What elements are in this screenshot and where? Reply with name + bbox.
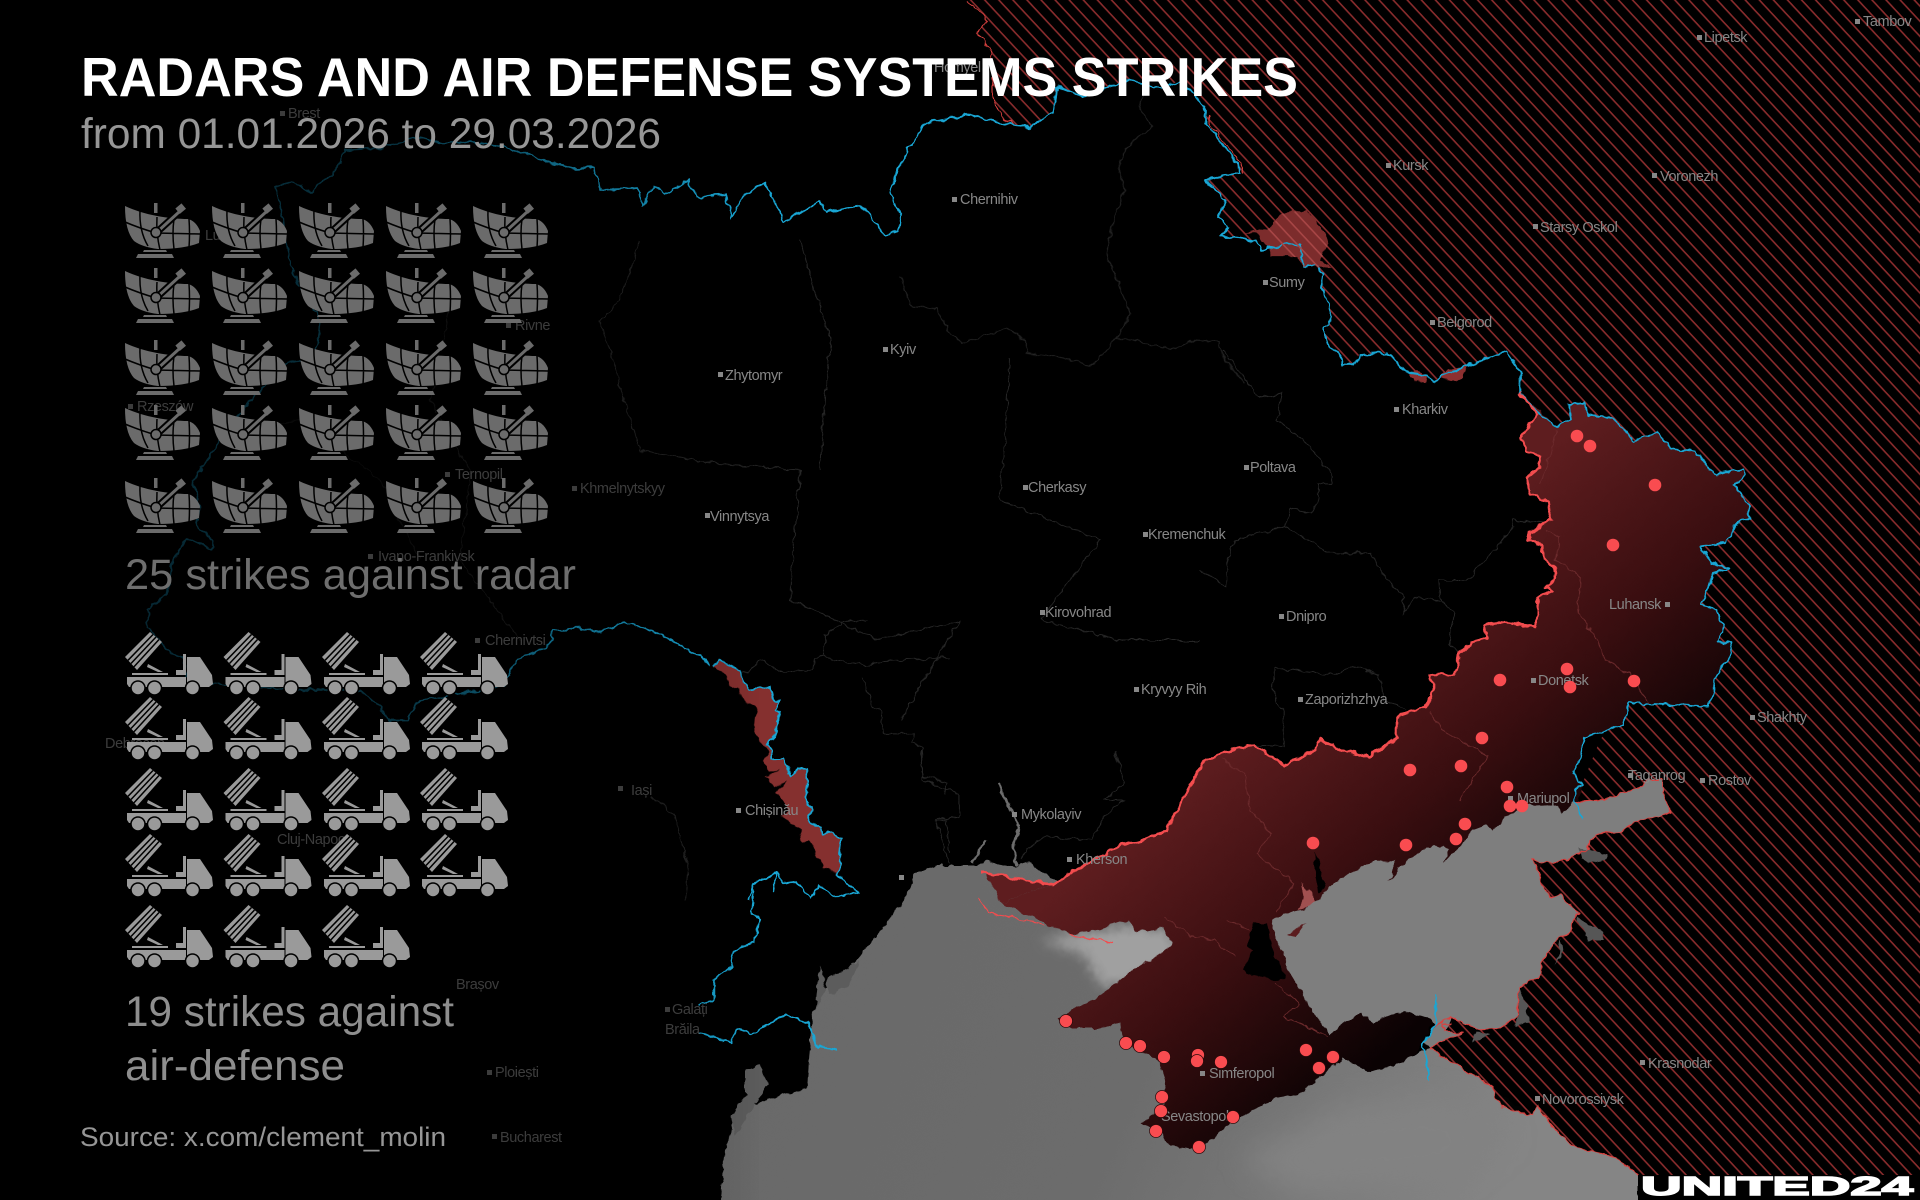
dimmed western labels [105, 106, 708, 1146]
city labels: Starsy Oskol [1540, 220, 1618, 236]
city labels [705, 14, 1913, 1125]
radar strikes caption: 25 strikes against radar [125, 551, 576, 599]
Black Sea shallow south of Crimea [1240, 1095, 1510, 1195]
strike markers [1060, 430, 1661, 1154]
hatch over Kursk pocket [1267, 210, 1332, 268]
dimmed western labels: Ploiești [495, 1065, 539, 1081]
dimmed western labels: Iași [631, 783, 652, 799]
city labels: Chernihiv [960, 192, 1019, 208]
Transnistria [713, 662, 842, 873]
city labels: Lipetsk [1704, 30, 1748, 46]
dimmed western labels: Ivano-Frankivsk [378, 549, 475, 565]
city labels: Kursk [1393, 158, 1429, 174]
occupied-area internal boundaries [1164, 430, 1650, 1037]
city labels: Shakhty [1757, 710, 1808, 726]
Dnipro and Bug rivers [972, 783, 1019, 865]
city labels: Zaporizhzhya [1305, 692, 1389, 708]
city labels: Taganrog [1628, 768, 1686, 784]
logo: UNITED24 [1638, 1171, 1920, 1200]
city labels: Luhansk [1609, 597, 1662, 613]
city labels: Chișinău [745, 803, 799, 819]
oblast boundaries [250, 90, 1544, 900]
air-defense launcher icon grid [125, 632, 508, 968]
hatched region: Russia [967, 0, 1920, 1200]
Kerch strait and Taman bay [1423, 1017, 1463, 1047]
Karkinit gulf shallows [1040, 925, 1180, 985]
dimmed western labels: Brest [288, 106, 320, 122]
subtitle: from 01.01.2026 to 29.03.2026 [81, 110, 661, 158]
city labels: Mykolayiv [1021, 807, 1082, 823]
dimmed western labels: Brașov [456, 977, 500, 993]
dimmed western labels: Ternopil [455, 467, 503, 483]
Sivash and reservoir cutouts [1242, 853, 1325, 982]
city labels: Kremenchuk [1148, 527, 1227, 543]
dimmed western labels: Debrecen [105, 736, 165, 752]
Arabat spit sliver [1287, 923, 1305, 937]
Sea of Azov [1272, 780, 1670, 1033]
city labels: Vinnytsya [710, 509, 770, 525]
dimmed western labels: Rivne [515, 318, 550, 334]
city labels: Kharkiv [1402, 402, 1449, 418]
city labels: Cherkasy [1028, 480, 1087, 496]
title: RADARS AND AIR DEFENSE SYSTEMS STRIKES [81, 46, 1298, 108]
dimmed western labels: Bucharest [500, 1130, 562, 1146]
Black Sea [718, 862, 1638, 1200]
dimmed western labels: Rzeszów [137, 399, 194, 415]
thin red boundary of hatched area [967, 0, 1670, 1175]
city labels: Mariupol [1517, 791, 1570, 807]
city labels: Sumy [1269, 275, 1306, 291]
air-defense strikes caption: 19 strikes against [125, 988, 454, 1036]
dimmed western labels: Cluj-Napoca [277, 832, 354, 848]
radar icon grid [125, 203, 548, 533]
city labels: Rostov [1708, 773, 1752, 789]
dimmed western labels: Lublin [205, 228, 242, 244]
dimmed western labels: Chernivtsi [485, 633, 546, 649]
city labels: Donetsk [1538, 673, 1590, 689]
Ukrainian state border, blue [148, 80, 1750, 1050]
Kerch strait line [1423, 993, 1436, 1080]
city labels: Sevastopol [1161, 1109, 1229, 1125]
city labels: Zhytomyr [725, 368, 783, 384]
dimmed western labels: Brăila [665, 1022, 701, 1038]
city labels: Simferopol [1209, 1066, 1274, 1082]
coastal lagoons and Danube delta [732, 960, 860, 1135]
city labels: Voronezh [1660, 169, 1718, 185]
air-defense strikes caption [125, 988, 454, 1090]
dimmed western labels: Khmelnytskyy [580, 481, 666, 497]
air-defense strikes caption: air-defense [125, 1042, 345, 1090]
city labels: Belgorod [1437, 315, 1492, 331]
city labels: Kherson [1076, 852, 1128, 868]
dimmed western labels: Galați [672, 1002, 708, 1018]
city labels: Dnipro [1286, 609, 1327, 625]
Dnipro delta occupied bank [985, 872, 1053, 903]
Kursk and Belgorod border pockets [1243, 210, 1466, 383]
city labels: Poltava [1250, 460, 1297, 476]
city labels: Tambov [1863, 14, 1913, 30]
city labels: Novorossiysk [1542, 1092, 1625, 1108]
left fade over base map [0, 0, 760, 1200]
source: Source: x.com/clement_molin [80, 1122, 446, 1152]
city labels: Kirovohrad [1045, 605, 1111, 621]
Azov-side lagoons [1472, 848, 1607, 1041]
city labels: Homyel [934, 60, 981, 76]
city labels: Kyiv [890, 342, 917, 358]
city labels: Krasnodar [1648, 1056, 1712, 1072]
city labels: Kryvyy Rih [1141, 682, 1207, 698]
occupied territory [1001, 393, 1750, 1150]
front line [977, 393, 1556, 943]
